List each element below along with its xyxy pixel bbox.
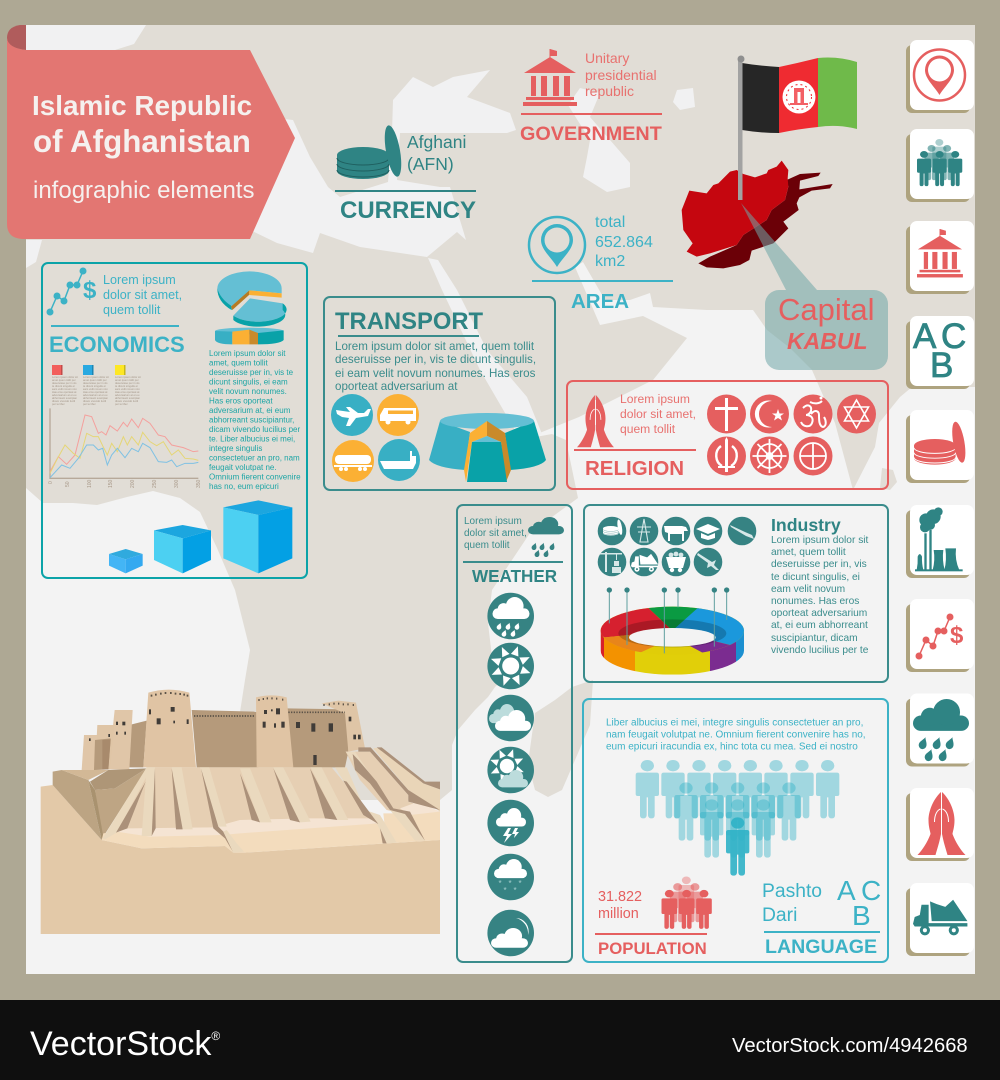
chart legend: Lorem ipsum dolor sit — [52, 376, 78, 379]
icon: crane — [598, 548, 626, 576]
icon: rain cloud small — [528, 517, 564, 558]
chart legend: Lorem ipsum dolor sit — [115, 376, 141, 379]
chart legend: deseruisse per in vis — [83, 381, 108, 385]
icon: graduation cap — [694, 517, 722, 545]
footer: watermark bar: ® — [211, 1029, 220, 1043]
chart legend: per te liber — [52, 402, 65, 406]
industry text: suscipiantur, dicam — [771, 633, 858, 644]
3D cylinder chart — [429, 413, 546, 482]
flag of Afghanistan on pole — [738, 56, 857, 200]
footer: watermark bar — [0, 1000, 1000, 1080]
government type: Unitary — [585, 50, 629, 66]
chart legend: dicam vivendo lucili — [83, 399, 107, 403]
chart legend: eam velit novum non — [52, 387, 77, 391]
economics heading: ECONOMICS — [49, 332, 185, 357]
economics intro text: Lorem ipsum — [103, 273, 176, 287]
chart legend: Lorem ipsum dolor sit — [83, 376, 109, 379]
panel: religion — [567, 381, 888, 489]
weather text: quem tollit — [464, 540, 510, 551]
icon: train tank — [332, 440, 374, 482]
religion text: Lorem ipsum — [620, 392, 690, 406]
card: chart and dollar — [906, 599, 974, 672]
chart legend: amet quem tollit per — [83, 378, 107, 382]
area block — [529, 214, 673, 313]
economics body text: consectetuer an pro, nam — [209, 454, 300, 462]
weather heading — [463, 561, 563, 586]
economics body text: feugait volutpat ne. — [209, 463, 277, 472]
chart legend: deseruisse per in vis — [115, 381, 140, 385]
chart legend: per te liber — [115, 402, 128, 406]
line chart: 0 — [48, 481, 54, 484]
languages: Dari — [762, 905, 797, 926]
footer: watermark bar: VectorStock — [30, 1025, 211, 1063]
icon: cross — [707, 394, 746, 434]
line chart — [48, 408, 202, 488]
title banner — [7, 25, 295, 239]
government block — [520, 49, 662, 145]
economics body text: velit novum nonumes. — [209, 387, 287, 396]
chart legend: eam velit novum non — [83, 387, 108, 391]
icon: dharma wheel — [750, 436, 789, 476]
industry text: vivendo lucilius per te — [771, 645, 869, 656]
economics body text: has no, eum epicuri — [209, 482, 279, 491]
chart legend: dicam vivendo lucili — [115, 399, 139, 403]
icon: crescent and star — [750, 394, 789, 434]
icon: government building — [523, 49, 577, 106]
chart legend — [52, 365, 141, 406]
panel: economics — [42, 263, 307, 578]
currency name: (AFN) — [407, 154, 454, 174]
government heading: GOVERNMENT — [520, 123, 662, 145]
religion heading: RELIGION — [585, 457, 684, 480]
card: government — [906, 221, 974, 294]
title banner: infographic elements — [33, 177, 254, 204]
panel: transport — [324, 297, 555, 490]
chart legend: per te liber — [83, 402, 96, 406]
area value: 652.864 — [595, 234, 653, 251]
panel: population and language — [583, 699, 888, 962]
icon: rifle — [728, 517, 756, 545]
card: praying hands — [906, 788, 974, 861]
left bastion — [53, 768, 147, 840]
currency block — [335, 124, 476, 224]
industry heading: Industry — [771, 515, 841, 535]
line chart: 150 — [108, 479, 114, 488]
government type: republic — [585, 83, 634, 99]
icon: mine cart — [662, 548, 690, 576]
industry text: deseruisse per in, vis — [771, 559, 867, 570]
ring chart with pins — [593, 587, 750, 677]
card: factory — [906, 505, 974, 578]
panel: industry — [584, 505, 888, 682]
industry text: nonumes. Has eros — [771, 596, 859, 607]
icon: cow — [662, 517, 690, 545]
card: rain cloud — [906, 694, 974, 766]
3D cube bars — [109, 500, 292, 573]
population value: million — [598, 906, 639, 922]
icon: snow: * — [503, 886, 507, 895]
card: letters — [906, 316, 974, 389]
economics body text: Has eros oporteat — [209, 396, 273, 406]
currency heading: CURRENCY — [340, 197, 476, 224]
chart legend: adversarium at ei eu — [115, 393, 140, 397]
icon: red people group — [662, 876, 712, 929]
capital callout: KABUL — [787, 328, 868, 354]
citadel windows — [89, 707, 361, 765]
religion text: dolor sit amet, — [620, 407, 696, 421]
chart legend: te dicunt singulis ei — [115, 384, 138, 388]
economics intro text: quem tollit — [103, 303, 161, 317]
people pyramid — [636, 760, 839, 876]
currency name: Afghani — [407, 132, 466, 152]
chart legend: amet quem tollit per — [115, 378, 139, 382]
population value: 31.822 — [598, 889, 642, 905]
economics body text: Lorem ipsum dolor sit — [209, 349, 285, 358]
icon: snow: * — [508, 879, 512, 888]
chart legend: te dicunt singulis ei — [83, 384, 106, 388]
card: chart and dollar: $ — [950, 622, 964, 649]
capital callout: Capital — [778, 292, 874, 327]
chart legend: amet quem tollit per — [52, 378, 76, 382]
icon: praying hands — [577, 395, 614, 447]
industry text: Lorem ipsum dolor sit — [771, 535, 868, 546]
icon: om — [794, 394, 832, 434]
transport heading: TRANSPORT — [335, 308, 484, 335]
icon: location pin — [529, 217, 585, 273]
icon: snow: * — [518, 879, 522, 888]
economics body text: integre singulis — [209, 444, 262, 453]
economics body text: Omnium fierent convenire — [209, 472, 301, 482]
religion heading — [574, 449, 696, 480]
icon: dump truck — [630, 548, 658, 576]
line chart: 100 — [87, 479, 93, 488]
population heading: POPULATION — [598, 939, 707, 958]
chart legend: Has eros oporteat at — [83, 390, 108, 394]
card: dump truck — [906, 883, 974, 956]
area value: total — [595, 214, 625, 231]
title banner: Islamic Republic — [32, 90, 252, 121]
area heading: AREA — [571, 290, 629, 313]
card: letters: B — [930, 346, 953, 385]
icon: ABC letters: A — [837, 875, 856, 906]
weather heading: WEATHER — [472, 567, 557, 586]
chart legend: adversarium at ei eu — [83, 393, 108, 397]
icon: coins — [337, 124, 404, 179]
illustration: Citadel of Herat — [41, 690, 440, 934]
transport text: deseruisse per in, vis te dicunt singulis, — [335, 353, 536, 366]
economics body text: abhorreant suscipiantur, — [209, 416, 294, 424]
line chart: 250 — [152, 479, 158, 488]
chart legend: deseruisse per in vis — [52, 381, 77, 385]
terraced slopes — [102, 747, 440, 853]
footer: watermark bar: VectorStock.com/4942668 — [732, 1035, 968, 1057]
economics body text: adversarium at, ei eum — [209, 406, 291, 415]
chart legend: adversarium at ei eu — [52, 393, 77, 397]
icon: ABC letters: C — [861, 875, 881, 906]
government type: presidential — [585, 67, 657, 83]
area value: km2 — [595, 253, 625, 270]
card: coins — [906, 410, 974, 483]
icon: partly cloudy — [487, 747, 534, 793]
languages: Pashto — [762, 881, 822, 902]
icon: ship — [378, 439, 420, 481]
sidebar: icon cards — [906, 40, 974, 956]
icon: khanda — [707, 436, 746, 476]
icon: thunderstorm — [487, 800, 534, 846]
chart legend: te dicunt singulis ei — [52, 384, 75, 388]
population text: nam feugait volutpat ne. Omnium fierent convenire has no, — [606, 730, 866, 740]
chart legend: abhorreant suscipian — [52, 396, 77, 400]
chart legend: Has eros oporteat at — [52, 390, 77, 394]
economics intro text: dolor sit amet, — [103, 288, 182, 302]
industry text: eam velit novum — [771, 584, 845, 595]
icon: rain — [487, 593, 534, 639]
chart legend: dicam vivendo lucili — [52, 399, 76, 403]
icon: syringe — [694, 548, 722, 576]
transport text: Lorem ipsum dolor sit amet, quem tollit — [335, 340, 534, 353]
icon: chart with dollar: $ — [83, 277, 97, 304]
title banner: of Afghanistan — [33, 124, 251, 159]
industry text: amet, quem tollit — [771, 547, 846, 558]
chart legend: abhorreant suscipian — [83, 396, 108, 400]
chart legend: eam velit novum non — [115, 387, 140, 391]
industry text: te dicunt singulis, ei — [771, 572, 860, 583]
capital callout — [741, 203, 888, 370]
transport text: oporteat adversarium at — [335, 380, 458, 393]
icon: chart with dollar — [46, 268, 97, 316]
economics body text: dicunt singulis, ei eam — [209, 378, 288, 386]
icon: circle cross — [794, 436, 832, 476]
icon: bus — [377, 394, 419, 436]
economics body text: te. Liber albucius ei mei, — [209, 434, 295, 444]
religion text: quem tollit — [620, 422, 676, 436]
line chart: 350 — [196, 479, 202, 488]
weather text: dolor sit amet, — [464, 528, 527, 539]
icon: ABC letters: B — [852, 900, 871, 931]
weather text: Lorem ipsum — [464, 516, 522, 527]
language heading: LANGUAGE — [765, 936, 877, 958]
icon: cloudy — [487, 695, 534, 741]
icon: coins small — [598, 517, 626, 545]
population text: Liber albucius ei mei, integre singulis consectetuer an pro, — [606, 718, 863, 728]
economics body text: deseruisse per in, vis te — [209, 368, 294, 377]
icon: star of David — [837, 394, 876, 434]
card: letters: C — [941, 317, 966, 356]
industry text: oporteat adversarium — [771, 608, 867, 619]
card: letters: A — [913, 317, 937, 356]
chart legend: Has eros oporteat at — [115, 390, 140, 394]
map of Afghanistan — [682, 161, 833, 268]
chart legend: abhorreant suscipian — [115, 396, 140, 400]
icon: snow — [487, 854, 534, 900]
line chart: 50 — [65, 481, 71, 487]
icon: snow: * — [513, 886, 517, 895]
transport text: ei eam velit novum nonumes. Has eros — [335, 367, 536, 380]
population text: eum epicuri iracundia ex, hinc tota cu mea. Sed ei nostro — [606, 742, 858, 752]
icon: sun — [487, 643, 534, 689]
pie chart — [215, 271, 287, 344]
card: location pin — [906, 40, 974, 113]
economics body text: amet, quem tollit — [209, 358, 268, 368]
economics body text: dicam vivendo lucilius per — [209, 425, 300, 434]
icon: airplane — [331, 394, 373, 436]
industry text: at, ei eum abhorreant — [771, 620, 868, 631]
line chart: 200 — [130, 479, 136, 488]
line chart: 300 — [174, 479, 180, 488]
icon: electric pylon — [630, 517, 658, 545]
card: people — [906, 129, 974, 202]
icon: night cloud — [487, 910, 534, 956]
panel: weather — [457, 505, 572, 962]
icon: snow: * — [498, 879, 502, 888]
